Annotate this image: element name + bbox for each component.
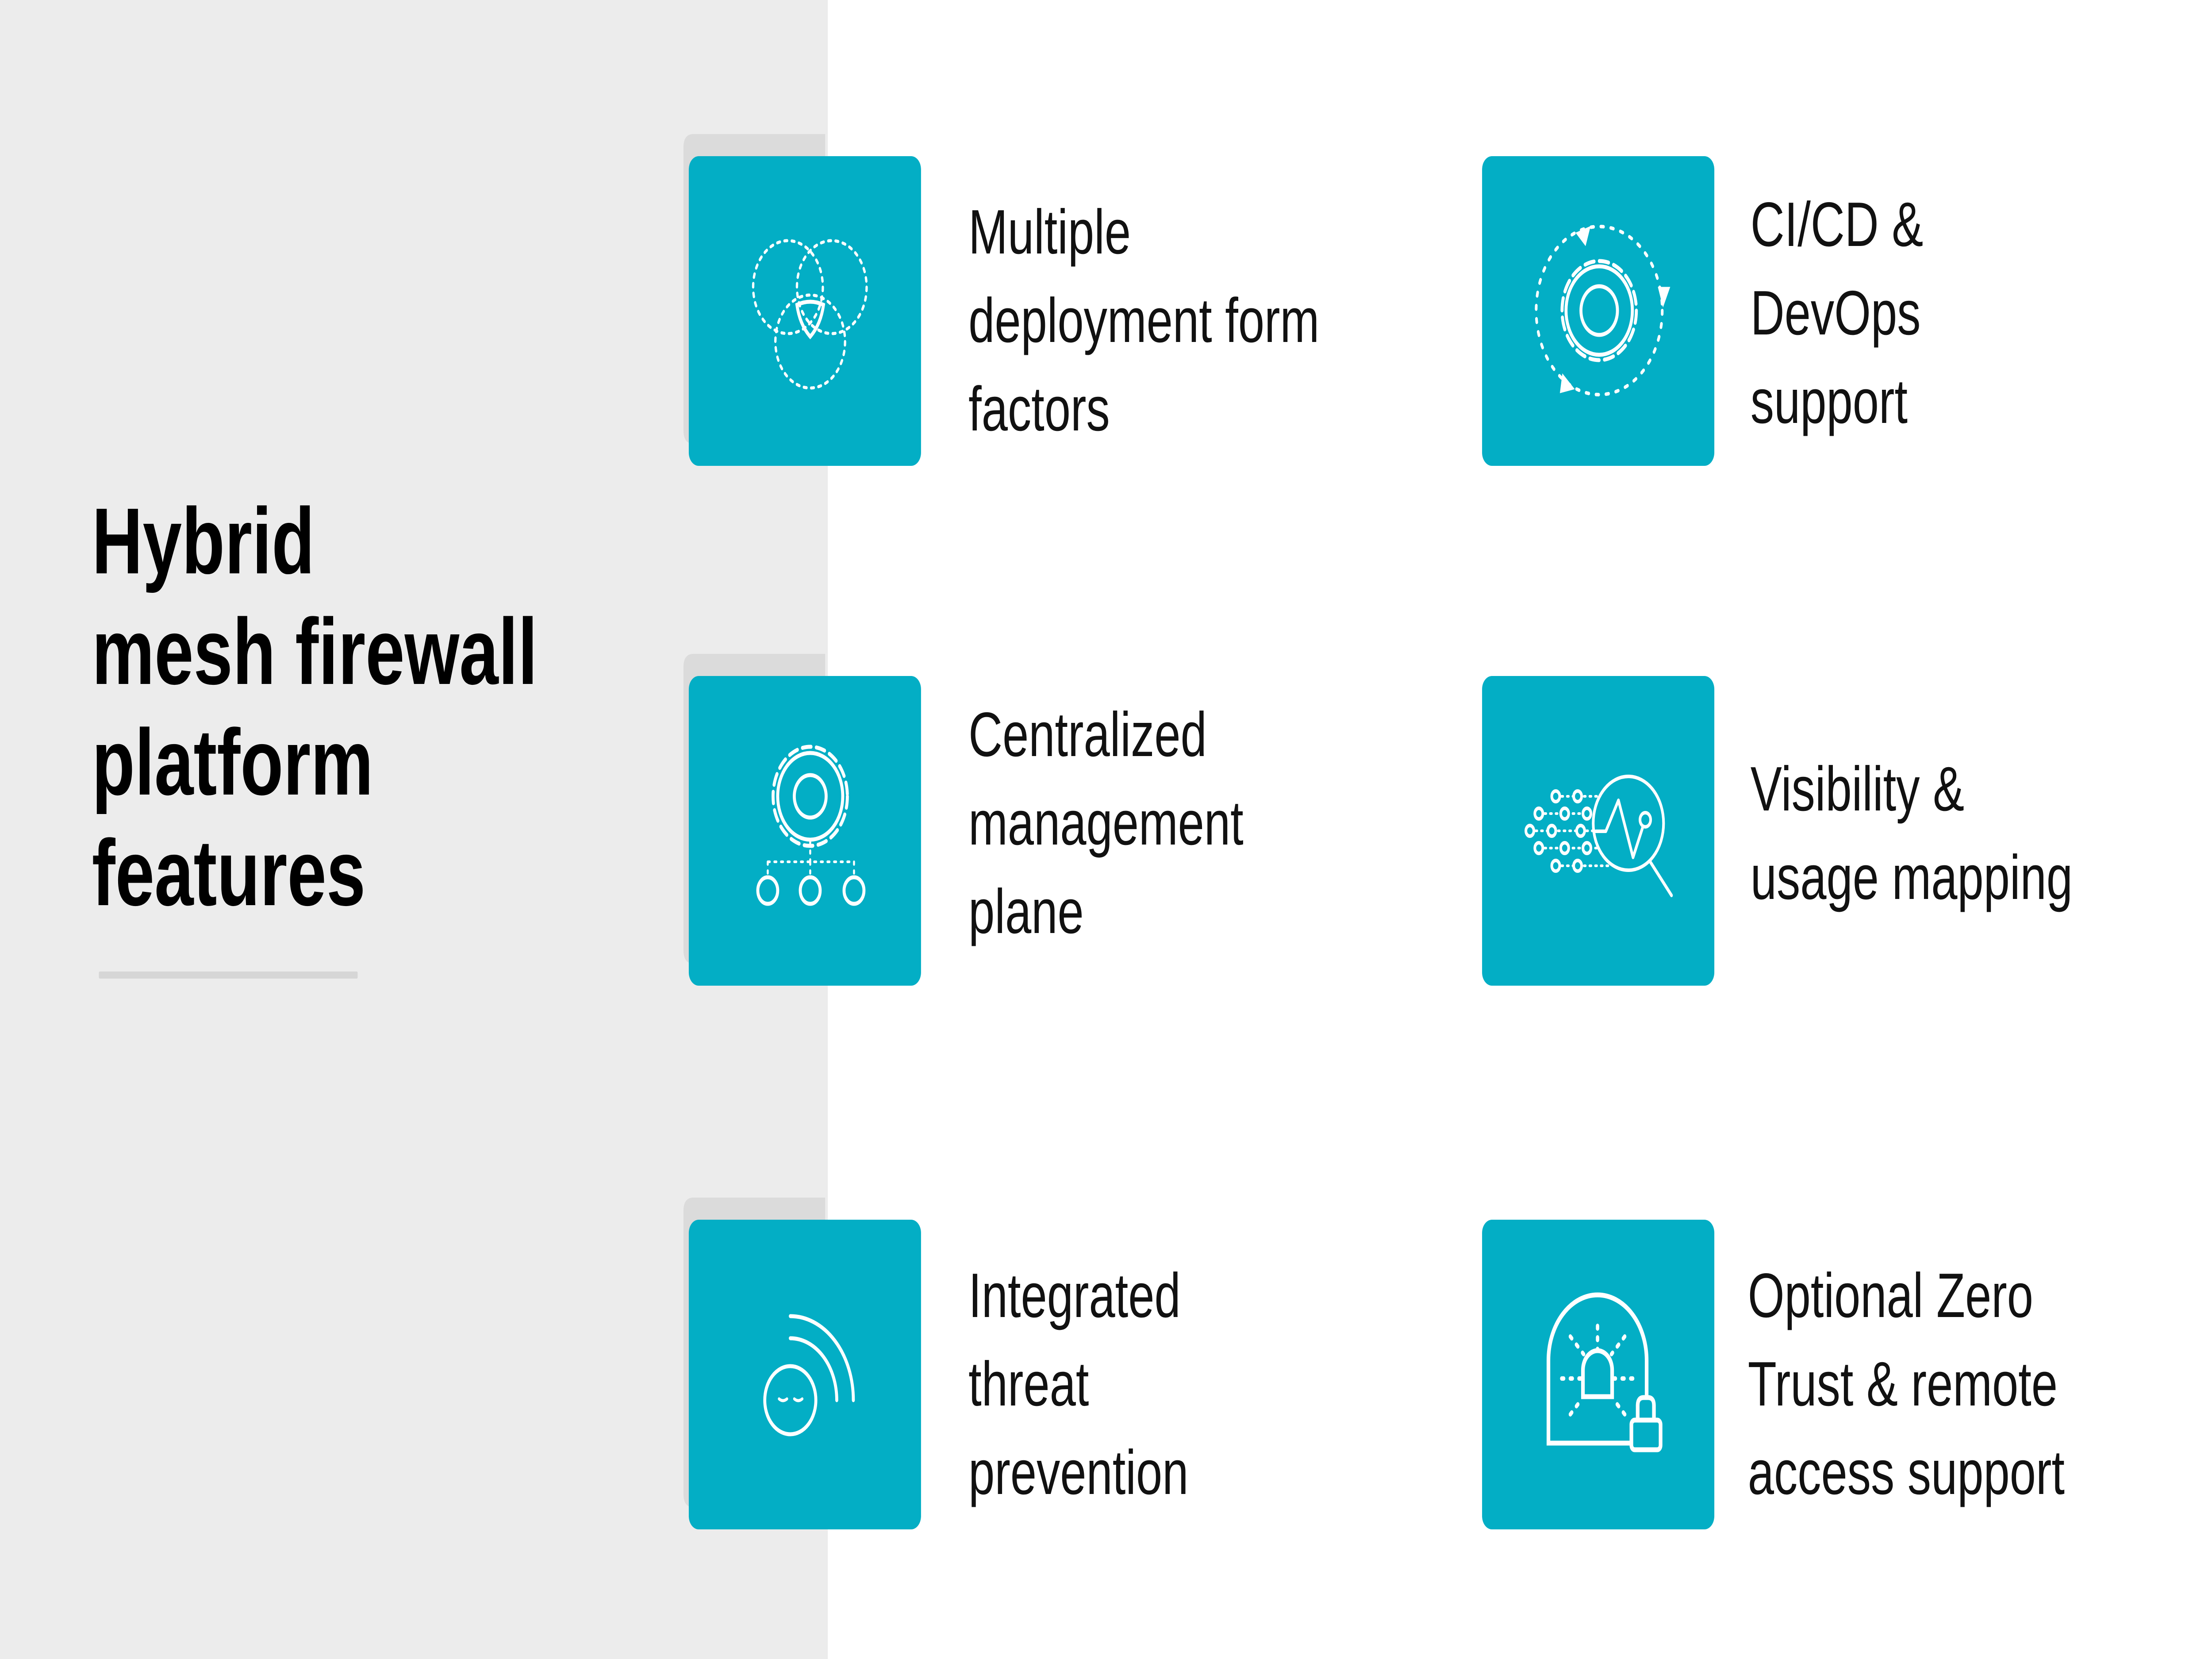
text: centralized management plane: management — [968, 787, 1244, 858]
text: multiple deployment form factors: deployment form — [968, 285, 1319, 356]
text: CI/CD & DevOps support: DevOps — [1751, 277, 1920, 348]
divider — [99, 972, 357, 979]
text: multiple deployment form factors: Multiple — [968, 196, 1131, 267]
text: CI/CD & DevOps support: support — [1751, 366, 1908, 437]
tile: zero trust — [1482, 1220, 1714, 1529]
tile: multiple deployment form factors — [689, 156, 921, 466]
shadow tile row 2 — [684, 654, 825, 964]
shadow tile row 3 — [684, 1198, 825, 1507]
text: visibility & usage mapping: usage mapping — [1751, 842, 2073, 913]
text: multiple deployment form factors: factors — [968, 373, 1110, 444]
icon: venn circles — [753, 241, 867, 388]
shadow tile row 1 — [684, 134, 825, 444]
text: centralized management plane: Centralized — [968, 699, 1207, 770]
icon: face with signal arcs — [765, 1316, 853, 1434]
title: platform — [92, 710, 373, 814]
left gray panel — [0, 0, 828, 1659]
title: Hybrid — [92, 488, 315, 593]
text: CI/CD & DevOps support: CI/CD & — [1751, 189, 1923, 260]
text: optional zero trust: Trust & remote — [1748, 1348, 2058, 1419]
text: integrated threat prevention: prevention — [968, 1437, 1188, 1508]
text: integrated threat prevention: threat — [968, 1348, 1089, 1419]
text: integrated threat prevention: Integrated — [968, 1260, 1181, 1331]
text: centralized management plane: plane — [968, 876, 1084, 947]
tile: visibility — [1482, 676, 1714, 986]
text: optional zero trust: access support — [1748, 1437, 2065, 1508]
title: features — [92, 820, 365, 925]
text: optional zero trust: Optional Zero — [1748, 1260, 2033, 1331]
tile: CI/CD — [1482, 156, 1714, 466]
tile: integrated threat prevention — [689, 1220, 921, 1529]
icon: magnifier with data nodes — [1526, 776, 1671, 895]
title: mesh firewall — [92, 599, 538, 704]
icon: alarm arch with lock — [1548, 1295, 1661, 1450]
icon: gear hierarchy — [758, 747, 864, 904]
text: visibility & usage mapping: Visibility & — [1751, 753, 1964, 824]
tile: centralized management — [689, 676, 921, 986]
icon: gear with cycle arrows — [1536, 227, 1668, 395]
